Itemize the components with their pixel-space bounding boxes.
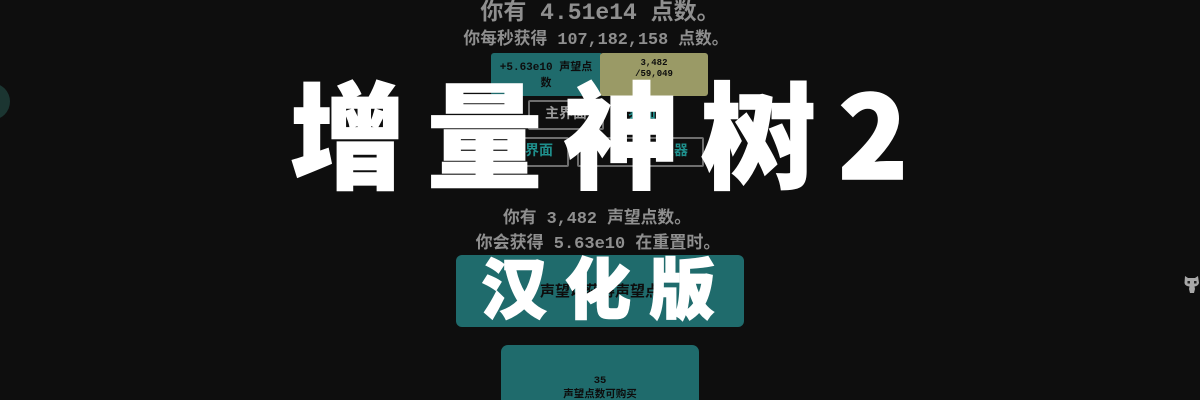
tab: main: 主界面 bbox=[545, 107, 587, 123]
button: prestige gain: 数 bbox=[540, 78, 552, 90]
upgrade card: 35 bbox=[594, 375, 606, 387]
prestige points text: 你有 3,482 声望点数。 bbox=[503, 210, 691, 229]
tab: left: 界面 bbox=[525, 144, 553, 160]
progress box bbox=[600, 53, 708, 96]
tab: second row top bbox=[612, 100, 672, 130]
tab: left bbox=[480, 137, 569, 167]
button: prestige gain bbox=[491, 53, 601, 96]
tab: second row top: 界面 bbox=[628, 107, 656, 123]
tab: right: 升级器 bbox=[646, 144, 688, 160]
button: reset for prestige: 声望以获得声望点 bbox=[540, 284, 660, 301]
icon: partial round node at left edge bbox=[0, 83, 10, 120]
points per second text: 你每秒获得 107,182,158 点数。 bbox=[463, 31, 729, 50]
upgrade card bbox=[501, 345, 699, 400]
prestige gain text: 你会获得 5.63e10 在重置时。 bbox=[476, 235, 720, 254]
points text: 你有 4.51e14 点数。 bbox=[480, 0, 720, 26]
icon: github cat bbox=[1184, 276, 1199, 293]
button: prestige gain: +5.63e10 声望点 bbox=[500, 62, 592, 74]
title: 增量神树2 bbox=[290, 47, 930, 213]
tab: main bbox=[528, 100, 604, 130]
progress box: 3,482 bbox=[640, 58, 668, 68]
button: reset for prestige bbox=[456, 255, 744, 327]
progress box: /59,049 bbox=[635, 69, 673, 79]
subtitle: 汉化版 bbox=[481, 237, 733, 333]
tab: right bbox=[577, 137, 704, 167]
